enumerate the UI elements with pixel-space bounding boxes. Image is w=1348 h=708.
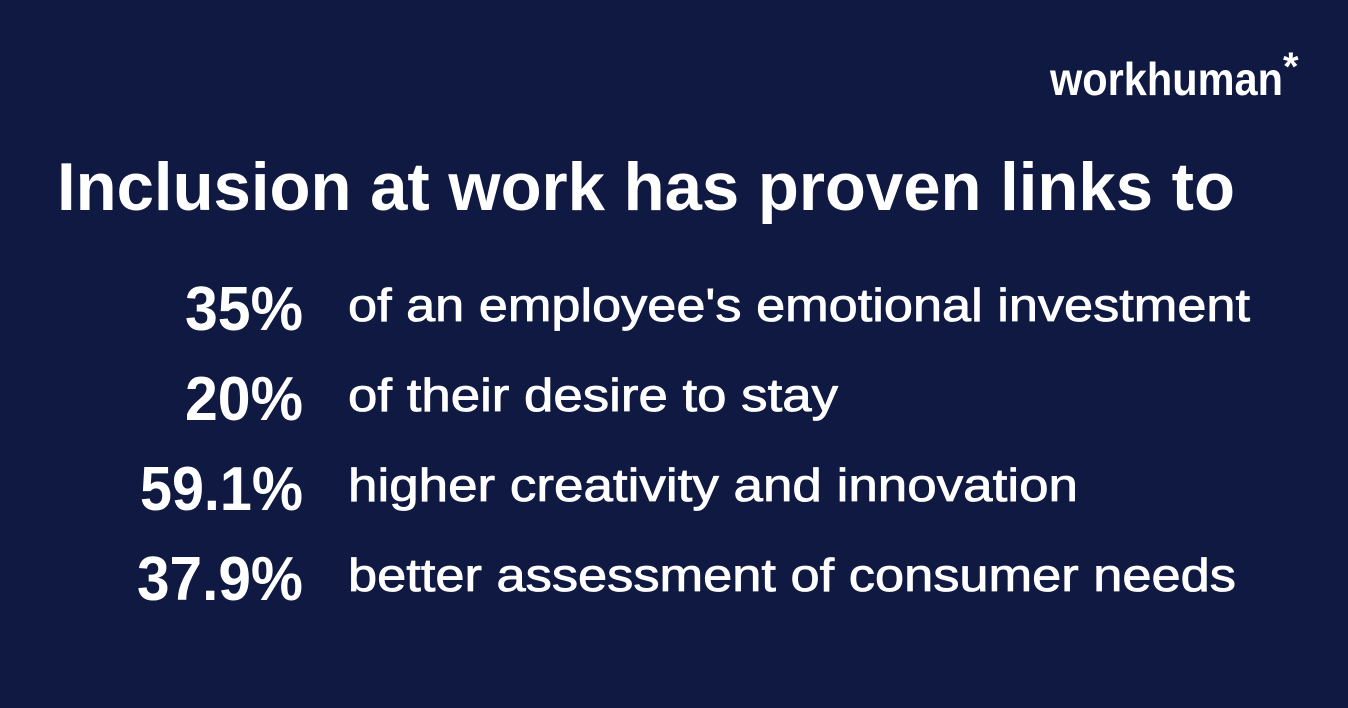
stat 3: 59.1%: [140, 455, 303, 524]
stat 1: [185, 275, 1250, 344]
stat 4: [137, 545, 1236, 614]
stat 1: of an employee's emotional investment: [348, 279, 1250, 331]
stat 3: higher creativity and innovation: [348, 459, 1078, 511]
stat 4: 37.9%: [137, 545, 303, 614]
stat 3: [140, 455, 1078, 524]
logo: workhuman: *: [1283, 45, 1299, 89]
stat 4: better assessment of consumer needs: [348, 549, 1236, 601]
stat 2: of their desire to stay: [348, 369, 838, 421]
title: Inclusion at work has proven links to: [57, 149, 1235, 225]
stat 2: [185, 365, 838, 434]
stat 1: 35%: [185, 275, 303, 344]
logo: workhuman: workhuman: [1049, 53, 1283, 105]
stat list: [137, 275, 1250, 614]
stat 2: 20%: [185, 365, 303, 434]
